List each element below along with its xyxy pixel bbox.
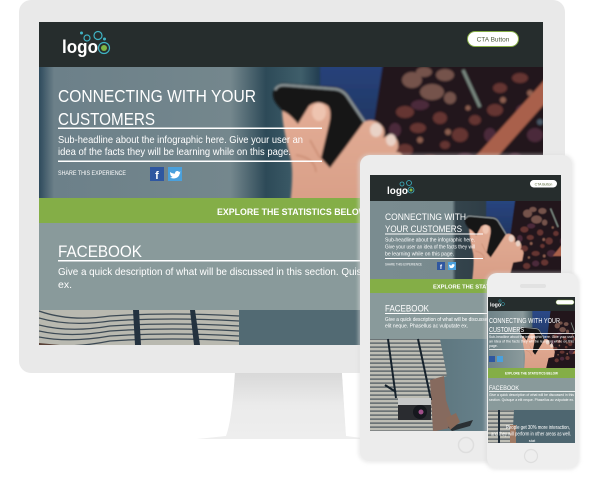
tablet home button <box>458 438 474 452</box>
tablet logo: logo <box>387 185 408 197</box>
monitor facebook section: Give a quick description of what will be discussed in this section. Quisque <box>58 266 378 278</box>
tablet logo <box>387 180 414 197</box>
phone screen <box>488 297 575 443</box>
phone speaker <box>520 284 546 288</box>
phone logo: logo <box>490 302 502 308</box>
phone stat photo: and they will perform in other areas as well. <box>491 432 571 438</box>
tablet camera photo <box>370 338 487 431</box>
monitor frame <box>19 0 565 373</box>
phone sub-headline: page. <box>489 344 498 348</box>
tablet facebook section: elit neque. Phasellus ac vulputate ex. <box>385 324 468 330</box>
phone stat photo: stat <box>529 438 536 443</box>
monitor social icons <box>150 167 182 182</box>
monitor logo: logo <box>62 37 98 57</box>
monitor facebook section: ex. <box>58 279 72 291</box>
tablet facebook section: FACEBOOK <box>385 304 429 314</box>
phone facebook section: section. Quisque a elit neque. Phasellus ac vulputate ex. <box>489 398 574 402</box>
tablet headline: YOUR CUSTOMERS <box>385 224 462 234</box>
phone headline: CONNECTING WITH YOUR <box>489 318 560 325</box>
monitor sub-headline: Sub-headline about the infographic here. Give your user an <box>58 134 303 146</box>
monitor facebook section: FACEBOOK <box>58 243 142 261</box>
monitor sub-headline <box>58 136 302 157</box>
tablet green banner <box>370 279 488 293</box>
tablet sub-headline: Sub-headline about the infographic here. <box>385 238 475 244</box>
monitor screen <box>39 22 543 345</box>
phone headline <box>489 318 560 332</box>
monitor facebook section <box>39 223 360 310</box>
tablet frame <box>358 154 574 463</box>
monitor headline: CUSTOMERS <box>58 109 155 129</box>
phone social icons <box>489 356 503 362</box>
phone facebook section: FACEBOOK <box>489 386 519 392</box>
phone hero photo <box>488 311 575 368</box>
phone facebook section <box>488 378 575 410</box>
monitor header bar <box>39 22 543 67</box>
monitor sub-headline: idea of the facts they will be learning while on this page. <box>58 146 291 158</box>
device: tablet <box>358 154 600 463</box>
monitor CTA button <box>468 32 518 46</box>
phone logo <box>490 300 504 308</box>
monitor stand <box>197 372 362 439</box>
phone frame <box>485 272 580 470</box>
monitor share label: SHARE THIS EXPERIENCE <box>58 171 126 177</box>
tablet CTA button: CTA Button <box>535 182 552 186</box>
tablet CTA button <box>530 180 557 188</box>
tablet sub-headline: be learning while on this page. <box>385 252 454 258</box>
monitor CTA button: CTA Button <box>477 36 510 44</box>
phone green banner <box>488 368 575 378</box>
tablet sub-headline <box>385 238 475 258</box>
monitor striped photo <box>39 310 360 345</box>
phone CTA button <box>556 300 574 304</box>
phone sub-headline <box>489 335 575 348</box>
phone home button <box>524 450 538 462</box>
device: phone <box>483 270 580 470</box>
monitor logo <box>62 32 110 57</box>
monitor headline <box>58 90 256 125</box>
tablet headline <box>385 214 466 232</box>
tablet facebook section: Give a quick description of what will be discussed <box>385 317 490 323</box>
monitor headline: CONNECTING WITH YOUR <box>58 86 256 106</box>
phone headline: CUSTOMERS <box>489 327 524 334</box>
tablet green banner: EXPLORE THE STATISTICS <box>433 284 508 290</box>
monitor social icons: f <box>155 170 159 182</box>
tablet share label: SHARE THIS EXPERIENCE <box>385 262 423 266</box>
tablet social icons <box>437 262 456 270</box>
tablet sub-headline: Give your user an idea of the facts they will <box>385 244 475 250</box>
phone sub-headline: Sub-headline about the infographic here. Give your user <box>489 335 575 339</box>
monitor green banner <box>39 198 360 223</box>
phone green banner: EXPLORE THE STATISTICS BELOW <box>505 372 559 376</box>
tablet social icons: f <box>440 264 443 271</box>
phone facebook section: Give a quick description of what will be discussed in this <box>489 393 574 397</box>
tablet header bar <box>370 175 561 201</box>
monitor hero photo <box>39 67 543 198</box>
tablet screen <box>370 175 561 431</box>
tablet hero photo <box>370 201 561 279</box>
phone stat photo: People get 30% more interaction, <box>506 425 570 431</box>
tablet headline: CONNECTING WITH <box>385 212 466 222</box>
phone header bar <box>488 297 575 311</box>
tablet facebook section <box>370 293 487 339</box>
monitor green banner: EXPLORE THE STATISTICS BELOW <box>217 207 367 218</box>
phone sub-headline: an idea of the facts they will be learning while on this <box>489 340 574 344</box>
phone stat photo <box>488 410 575 443</box>
